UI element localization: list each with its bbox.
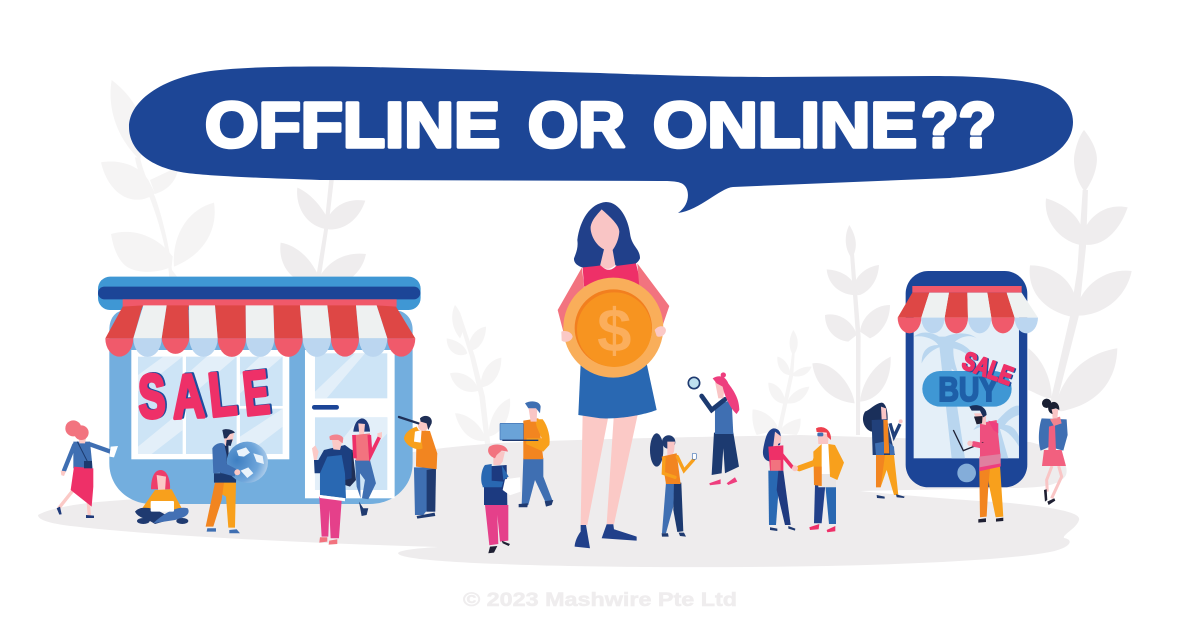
person: man with telescope bbox=[399, 416, 437, 519]
coin: $ bbox=[597, 296, 631, 365]
plant: small left of centre bbox=[447, 305, 510, 447]
SALE lettering: E bbox=[242, 357, 274, 428]
SALE lettering: S bbox=[139, 362, 168, 431]
ground shadow bbox=[38, 435, 1079, 567]
SALE lettering: A bbox=[172, 361, 208, 431]
person: man with glasses bbox=[792, 427, 844, 532]
person: woman in pink top bbox=[353, 418, 382, 516]
skirt bbox=[578, 363, 657, 418]
phone screen bbox=[914, 293, 1019, 458]
phone bbox=[898, 271, 1038, 487]
person: bearded man with laptop bbox=[953, 405, 1003, 523]
plant: behind store centre bbox=[280, 178, 366, 279]
title bbox=[205, 89, 996, 161]
person: woman with magnifying glass bbox=[688, 372, 739, 485]
BUY button: BUY bbox=[938, 371, 999, 409]
person: man holding globe bbox=[206, 429, 268, 533]
plant: far right background bbox=[1028, 130, 1132, 411]
hair bbox=[574, 202, 640, 269]
home button bbox=[957, 464, 976, 482]
SALE lettering: L bbox=[205, 359, 239, 430]
person: woman shaking hands bbox=[763, 428, 795, 531]
person: man with laptop bbox=[500, 401, 553, 507]
SALE lettering: L bbox=[207, 358, 241, 430]
SALE lettering: A bbox=[170, 362, 206, 432]
phone awning bbox=[898, 286, 1038, 333]
roof bar bbox=[98, 277, 421, 310]
person: boy with pink hair and paper bbox=[481, 444, 521, 553]
plant: centre right background bbox=[812, 225, 891, 435]
store building bbox=[98, 277, 421, 504]
title: ONLINE bbox=[653, 89, 917, 161]
person: ponytail girl with phone bbox=[650, 433, 696, 537]
SALE lettering: S bbox=[137, 363, 167, 432]
woman holding coin bbox=[558, 202, 669, 548]
title: ?? bbox=[921, 89, 996, 161]
person: woman in striped dress bbox=[1039, 399, 1068, 505]
door bbox=[305, 350, 395, 498]
copyright: © 2023 Mashwire Pte Ltd bbox=[463, 589, 737, 611]
coin bbox=[563, 278, 663, 378]
SALE lettering bbox=[137, 357, 274, 432]
shop window bbox=[131, 350, 289, 459]
palm trees bbox=[914, 332, 1019, 458]
awning bbox=[105, 299, 415, 357]
plant: top left background bbox=[101, 80, 215, 278]
title: OR bbox=[528, 89, 625, 161]
phone SALE lettering: SALE bbox=[959, 347, 1017, 391]
plant: small right of centre bbox=[752, 330, 812, 435]
SALE lettering: E bbox=[240, 358, 272, 428]
title: OFFLINE bbox=[205, 89, 500, 161]
person: woman sitting with laptop bbox=[135, 470, 189, 524]
shoes bbox=[575, 524, 637, 548]
top bbox=[583, 263, 642, 287]
store wall bbox=[109, 310, 413, 504]
legs bbox=[581, 413, 638, 525]
speech bubble bbox=[129, 66, 1073, 213]
sleeves bbox=[558, 263, 669, 337]
phone SALE lettering: SALE bbox=[960, 348, 1018, 392]
hands over coin bbox=[561, 326, 666, 342]
person: woman with long hair bbox=[863, 403, 905, 499]
phone body bbox=[906, 271, 1027, 487]
neck and face bbox=[591, 209, 619, 269]
person: man in hoodie with backpack bbox=[312, 435, 356, 545]
person: woman walking with bag bbox=[57, 420, 118, 518]
